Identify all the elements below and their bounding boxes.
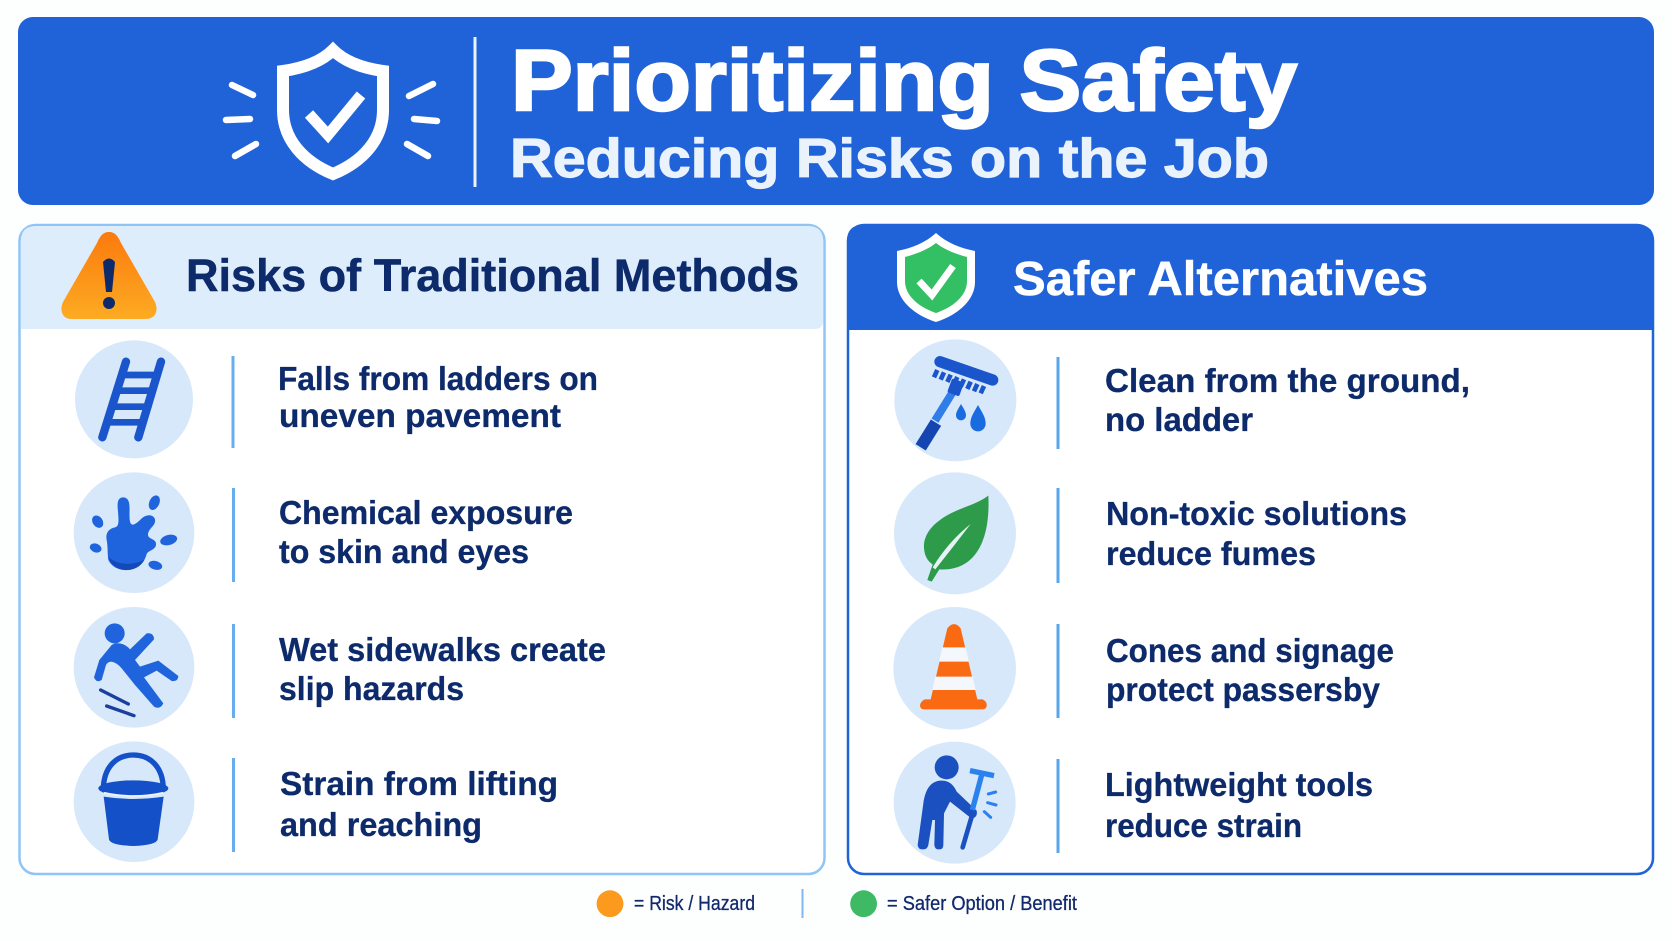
text: ladder falls: uneven pavement: [279, 397, 561, 434]
icon: ladder: [75, 340, 193, 458]
header divider: [474, 37, 476, 187]
icon: worker with lightweight tool: [894, 742, 1016, 864]
legend: risk label: = Risk / Hazard: [634, 893, 755, 915]
subtitle: Reducing Risks on the Job: [510, 127, 1269, 189]
icon: green shield: [897, 233, 975, 322]
icon: traffic cone: [893, 607, 1016, 730]
row: lifting strain: [74, 741, 558, 862]
legend: safer label: = Safer Option / Benefit: [887, 893, 1077, 915]
text: lifting strain: [280, 765, 558, 843]
text: lifting strain: and reaching: [280, 806, 482, 843]
text: chemical exposure: [279, 494, 573, 570]
row: slip hazards: [74, 607, 606, 728]
icon: slipping person: [74, 607, 194, 728]
heading: Safer Alternatives: [1013, 253, 1428, 306]
text: clean from the ground: [1105, 362, 1470, 438]
legend: [597, 889, 1077, 918]
text: non-toxic solutions: Non-toxic solutions: [1106, 495, 1407, 532]
icon: shield with check and rays: [226, 50, 437, 174]
title: Prioritizing Safety: [511, 33, 1297, 129]
text: ladder falls: Falls from ladders on: [278, 360, 598, 397]
text: slip hazards: [279, 631, 606, 707]
legend: risk swatch: [597, 890, 623, 917]
icon: leaf: [894, 472, 1016, 594]
text: clean from the ground: Clean from the ground,: [1105, 362, 1470, 399]
row divider: [232, 488, 235, 582]
icon: warning triangle: [61, 232, 157, 319]
text: lightweight tools: [1105, 766, 1373, 844]
row divider: [1056, 759, 1060, 853]
panel: risks of traditional methods: [20, 225, 824, 874]
row: cones and signage: [893, 607, 1394, 730]
row: chemical exposure: [74, 472, 573, 593]
icon: bucket: [74, 741, 194, 862]
row divider: [232, 356, 234, 448]
row divider: [1056, 488, 1060, 583]
icon: long-handled brush with drops: [894, 339, 1016, 461]
text: non-toxic solutions: [1106, 495, 1407, 572]
legend divider: [802, 889, 804, 918]
panel: safer alternatives: [847, 225, 1654, 874]
text: ladder falls: [278, 360, 598, 434]
text: non-toxic solutions: reduce fumes: [1106, 535, 1316, 572]
row: clean from the ground: [894, 339, 1470, 461]
text: slip hazards: slip hazards: [279, 670, 464, 707]
text: lightweight tools: reduce strain: [1105, 807, 1302, 844]
row: non-toxic solutions: [894, 472, 1407, 594]
icon: chemical splash: [74, 472, 194, 593]
panel header background: [847, 225, 1654, 330]
text: chemical exposure: Chemical exposure: [279, 494, 573, 531]
text: cones and signage: [1106, 632, 1394, 708]
text: clean from the ground: no ladder: [1105, 401, 1253, 438]
row divider: [232, 624, 235, 718]
row divider: [1056, 624, 1060, 718]
heading: Risks of Traditional Methods: [186, 250, 799, 301]
text: lightweight tools: Lightweight tools: [1105, 766, 1373, 803]
row divider: [1056, 357, 1060, 449]
row: lightweight tools: [894, 742, 1373, 864]
row: ladder falls: [75, 340, 598, 458]
text: cones and signage: protect passersby: [1106, 671, 1381, 708]
text: chemical exposure: to skin and eyes: [279, 533, 529, 570]
header banner: [18, 17, 1654, 205]
text: lifting strain: Strain from lifting: [280, 765, 558, 802]
row divider: [232, 758, 235, 852]
panel header background: [21, 226, 823, 329]
text: slip hazards: Wet sidewalks create: [279, 631, 606, 668]
text: cones and signage: Cones and signage: [1106, 632, 1394, 669]
legend: safer swatch: [850, 890, 877, 917]
